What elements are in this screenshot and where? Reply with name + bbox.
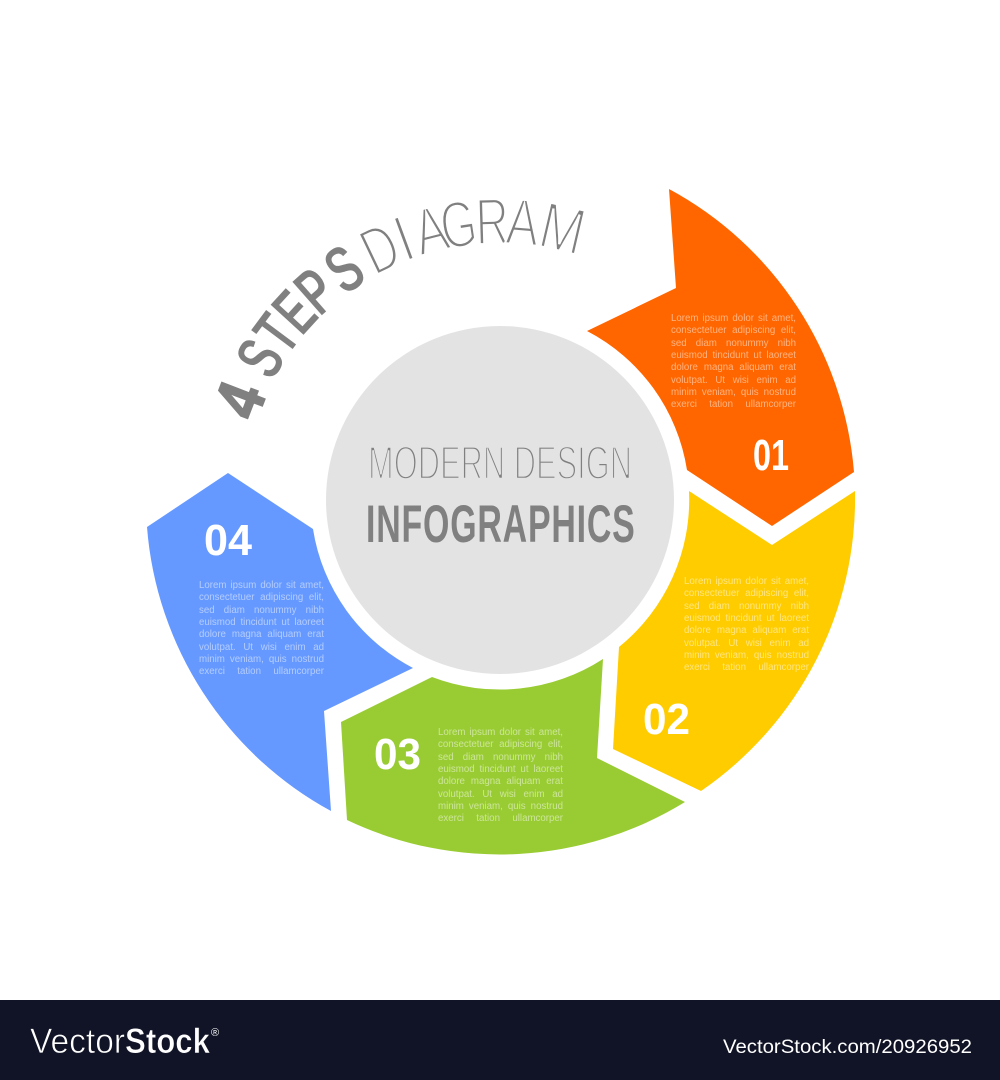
step 01 text: volutpat. Ut wisi enim ad xyxy=(671,375,796,386)
step 02 text: exerci tation ullamcorper xyxy=(684,662,809,673)
footer logo: Stock xyxy=(125,1022,210,1061)
curved title: 4 steps diagram: S xyxy=(220,327,299,389)
step 01 text: exerci tation ullamcorper xyxy=(671,399,796,410)
step 04 text: exerci tation ullamcorper xyxy=(199,666,324,677)
center circle xyxy=(326,326,674,674)
green arrow segment xyxy=(341,659,685,854)
yellow arrow segment xyxy=(613,491,855,791)
center heading: infographics: INFOGRAPHICS xyxy=(366,496,635,554)
curved title: 4 steps diagram: I xyxy=(384,201,423,276)
curved title: 4 steps diagram: M xyxy=(533,188,592,269)
step 03 text: minim veniam, quis nostrud xyxy=(438,801,563,812)
step 02 text: consectetuer adipiscing elit, xyxy=(684,588,809,599)
step 03 text xyxy=(438,727,564,829)
step 01 text: sed diam nonummy nibh xyxy=(671,338,796,349)
step 02 text: Lorem ipsum dolor sit amet, xyxy=(684,576,809,587)
curved title: 4 steps diagram: T xyxy=(239,300,314,366)
step 03 text: Lorem ipsum dolor sit amet, xyxy=(438,727,563,738)
step 02 text: volutpat. Ut wisi enim ad xyxy=(684,638,809,649)
curved title: 4 steps diagram xyxy=(199,185,592,427)
curved title: 4 steps diagram: E xyxy=(258,276,331,347)
step 01 text: consectetuer adipiscing elit, xyxy=(671,325,796,336)
step 03 text: consectetuer adipiscing elit, xyxy=(438,739,563,750)
step 04 text: sed diam nonummy nibh xyxy=(199,605,324,616)
step 02 text: minim veniam, quis nostrud xyxy=(684,650,809,661)
footer logo: ® xyxy=(211,1027,219,1039)
step 04 text: dolore magna aliquam erat xyxy=(199,629,324,640)
step 01 number: 01 xyxy=(753,431,789,480)
step 02 text: sed diam nonummy nibh xyxy=(684,601,809,612)
curved title: 4 steps diagram: R xyxy=(475,185,510,260)
step 02 number: 02 xyxy=(643,695,690,744)
step 04 text: volutpat. Ut wisi enim ad xyxy=(199,642,324,653)
panel: step 02 yellow xyxy=(613,491,855,791)
step 03 text: dolore magna aliquam erat xyxy=(438,776,563,787)
curved title: 4 steps diagram: A xyxy=(504,185,542,261)
step 03 text: volutpat. Ut wisi enim ad xyxy=(438,789,563,800)
footer bar xyxy=(0,1000,1000,1080)
step 02 text: euismod tincidunt ut laoreet xyxy=(684,613,809,624)
step 01 text xyxy=(671,313,797,415)
step 01 text: Lorem ipsum dolor sit amet, xyxy=(671,313,796,324)
orange arrow segment xyxy=(587,189,854,526)
step 01 text: dolore magna aliquam erat xyxy=(671,362,796,373)
footer logo xyxy=(30,1022,219,1061)
step 04 text xyxy=(199,580,325,682)
step 04 text: consectetuer adipiscing elit, xyxy=(199,592,324,603)
step 03 text: sed diam nonummy nibh xyxy=(438,752,563,763)
panel: step 03 green xyxy=(341,659,685,854)
step 03 text: euismod tincidunt ut laoreet xyxy=(438,764,563,775)
curved title: 4 steps diagram: 4 xyxy=(199,372,280,427)
step 01 text: euismod tincidunt ut laoreet xyxy=(671,350,796,361)
panel: step 01 orange xyxy=(587,189,854,526)
step 04 number: 04 xyxy=(204,516,253,565)
panel: step 04 blue xyxy=(147,473,413,811)
center heading: modern design: MODERN DESIGN xyxy=(368,436,632,489)
curved title: 4 steps diagram: D xyxy=(349,208,411,290)
step 04 text: minim veniam, quis nostrud xyxy=(199,654,324,665)
footer logo: Vector xyxy=(30,1022,125,1061)
step 04 text: euismod tincidunt ut laoreet xyxy=(199,617,324,628)
step 02 text xyxy=(684,576,810,678)
blue arrow segment xyxy=(147,473,413,811)
curved title: 4 steps diagram: G xyxy=(435,186,482,264)
curved title: 4 steps diagram: S xyxy=(311,230,377,308)
footer image id: VectorStock.com/20926952 xyxy=(723,1036,972,1058)
step 01 text: minim veniam, quis nostrud xyxy=(671,387,796,398)
step 04 text: Lorem ipsum dolor sit amet, xyxy=(199,580,324,591)
step 02 text: dolore magna aliquam erat xyxy=(684,625,809,636)
curved title: 4 steps diagram: P xyxy=(280,253,351,328)
curved title: 4 steps diagram: A xyxy=(406,191,456,270)
step 03 text: exerci tation ullamcorper xyxy=(438,813,563,824)
step 03 number: 03 xyxy=(374,730,421,779)
